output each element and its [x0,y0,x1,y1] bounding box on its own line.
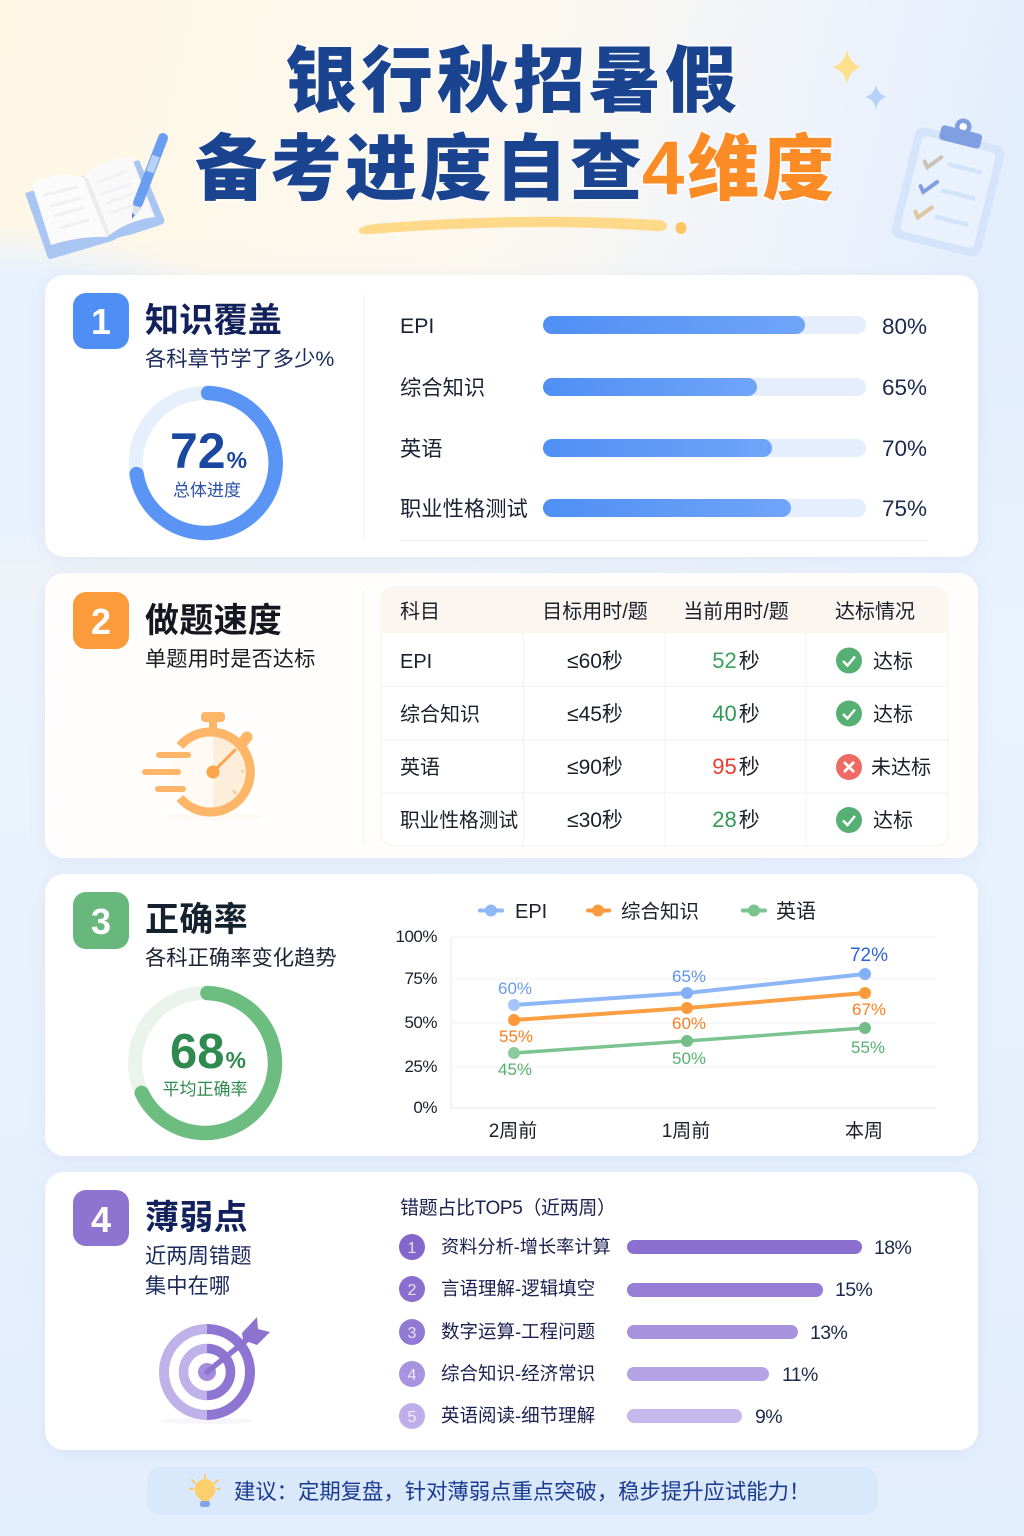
row: 职业性格测试: ≤30秒 [567,809,623,832]
row: 英语: 95秒 [712,754,760,779]
ring: average accuracy 68%: 68% [170,1025,246,1079]
row: 英语: 未达标 [871,756,931,779]
subheading: 近两周错题 [145,1244,252,1268]
bar: 职业性格测试 75%: 职业性格测试 [400,497,528,521]
rank 1: 18% [399,1234,911,1260]
y axis labels: 75% [404,969,437,988]
row: EPI [400,648,913,674]
bar: 综合知识 65%: 综合知识 [400,376,485,400]
row: 综合知识: 40秒 [712,701,760,726]
subheading: 各科章节学了多少% [145,347,334,371]
row: 英语: 英语 [400,756,440,779]
ranked list: error share top 5 [399,1197,911,1429]
row: EPI: ≤60秒 [567,650,623,673]
rank 3: 13%: 13% [810,1322,847,1344]
table header [400,600,915,623]
row: 综合知识: 达标 [873,703,913,726]
icon: clipboard checklist [890,110,1010,258]
x axis labels: 1周前 [662,1120,710,1142]
series: 综合知识: 55% [499,1027,533,1046]
subheading [145,1244,252,1298]
rank 5: 9%: 5 [408,1409,417,1426]
badge 4: 4 [91,1199,111,1240]
row: EPI: 52秒 [712,648,760,673]
series: EPI [498,945,888,1011]
table header: 达标情况 [835,600,915,623]
row: 综合知识: ≤45秒 [567,703,623,726]
subheading: 集中在哪 [145,1274,230,1298]
rank 5: 9% [399,1403,782,1429]
bar: EPI 80% [400,314,927,339]
row: 英语: ≤90秒 [567,756,623,779]
y axis labels: 100% [396,927,437,946]
series: EPI: 72% [850,945,888,966]
bar: EPI 80%: 80% [882,314,927,339]
y axis labels: 0% [413,1098,437,1117]
icon: open book and pen [25,138,164,259]
table: time per question [381,587,948,846]
subheading: 单题用时是否达标 [145,647,315,671]
badge 3: 3 [91,901,111,942]
series: 英语 [498,1022,885,1079]
row: 职业性格测试 [400,807,913,833]
series: EPI: 65% [672,967,706,986]
rank 4: 11%: 4 [408,1367,417,1384]
x axis labels: 2周前 [489,1120,537,1142]
callout: advice banner [147,1467,878,1515]
legend: EPI [515,901,547,923]
advice text: 建议：定期复盘，针对薄弱点重点突破，稳步提升应试能力！ [234,1480,810,1504]
ring: average accuracy 68% [133,991,277,1135]
icon: target with arrow [161,1317,270,1424]
badge 1 [73,293,129,349]
series: 英语: 55% [851,1038,885,1057]
table header: 科目 [400,600,440,623]
table header: 当前用时/题 [683,600,789,623]
title: 银行秋招暑假 [285,42,741,122]
ring: overall progress 72%: 总体进度 [173,481,241,500]
row: EPI: 达标 [873,650,913,673]
badge 4 [73,1190,129,1246]
row: 英语 [400,754,931,780]
icon: stopwatch [145,712,263,821]
rank 4: 11%: 综合知识-经济常识 [441,1363,595,1384]
rank 3: 13%: 3 [408,1325,417,1342]
subheading: 各科正确率变化趋势 [145,946,337,970]
heading: accuracy: 正确率 [145,901,248,939]
rank 5: 9%: 9% [755,1406,782,1428]
panel: accuracy [45,874,978,1156]
bar: 职业性格测试 75%: 75% [882,496,927,521]
bar: 综合知识 65% [400,375,927,400]
heading: weak points: 薄弱点 [145,1199,248,1237]
rank 2: 15% [399,1276,872,1302]
panel: solving speed [45,573,978,858]
legend [480,900,816,923]
heading: solving speed: 做题速度 [145,602,282,640]
rank 1: 18%: 18% [874,1237,911,1259]
table header: 目标用时/题 [542,600,648,623]
row: 综合知识: 综合知识 [400,703,480,726]
legend: 英语 [776,900,816,923]
y axis labels: 25% [404,1057,437,1076]
rank 1: 18%: 1 [408,1240,417,1257]
rank 2: 15%: 言语理解-逻辑填空 [441,1278,595,1299]
rank 4: 11% [399,1361,818,1387]
rank 3: 13% [399,1319,847,1345]
y axis labels: 50% [404,1013,437,1032]
icon: sparkles [832,50,887,110]
list heading: 错题占比TOP5（近两周） [400,1197,616,1219]
row: 职业性格测试: 职业性格测试 [400,810,518,832]
badge 2: 2 [91,601,111,642]
x axis labels: 本周 [845,1120,883,1142]
badge 3 [73,892,129,949]
badge 1: 1 [91,301,111,342]
bar chart: subject coverage [400,314,927,521]
series: 英语: 45% [498,1060,532,1079]
legend: 综合知识 [621,901,699,923]
ring: overall progress 72%: 72% [170,423,247,479]
rank 5: 9%: 英语阅读-细节理解 [441,1405,595,1426]
bar: EPI 80%: EPI [400,314,434,338]
series: 综合知识: 60% [672,1014,706,1033]
title underline [359,217,686,234]
row: 综合知识 [400,700,913,726]
bar: 综合知识 65%: 65% [882,375,927,400]
rank 3: 13%: 数字运算-工程问题 [441,1321,595,1342]
panel: knowledge coverage [45,275,978,557]
title [195,42,837,211]
ring: overall progress 72% [133,391,278,535]
rank 4: 11%: 11% [782,1364,818,1386]
bar: 英语 70%: 英语 [400,437,443,461]
x axis labels [489,1120,883,1142]
rank 2: 15%: 15% [835,1279,872,1301]
ring: average accuracy 68%: 平均正确率 [162,1080,248,1099]
title: 备考进度自查4维度 [195,126,837,211]
icon: light bulb [190,1475,220,1507]
series: 综合知识: 67% [852,1000,886,1019]
line chart: accuracy trend [396,900,936,1142]
bar: 职业性格测试 75% [400,496,927,521]
row: EPI: EPI [400,651,432,673]
rank 2: 15%: 2 [408,1282,417,1299]
series: EPI: 60% [498,979,532,998]
heading: knowledge coverage: 知识覆盖 [145,302,282,340]
series: 英语: 50% [672,1049,706,1068]
series: 综合知识 [499,987,886,1046]
bar: 英语 70%: 70% [882,436,927,461]
y axis labels [396,927,437,1117]
rank 1: 18%: 资料分析-增长率计算 [441,1237,611,1257]
bar: 英语 70% [400,436,927,461]
panel: weak points [45,1172,978,1450]
row: 职业性格测试: 达标 [873,809,913,832]
badge 2 [73,592,129,649]
row: 职业性格测试: 28秒 [712,807,760,832]
